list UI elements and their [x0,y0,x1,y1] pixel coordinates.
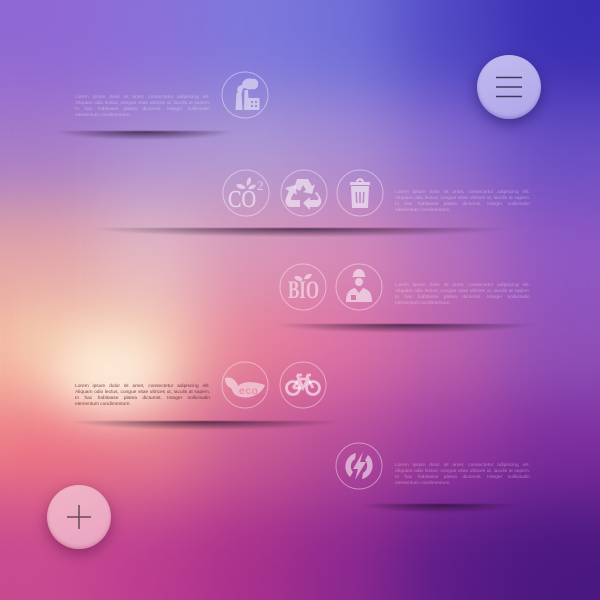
panel: row 1 factory [62,72,268,140]
icon: CO2 leaf [222,170,270,216]
text block: elementum condimentum. [395,301,451,306]
icon: recycle [280,170,328,216]
panel: row 2 CO2, recycle, bin [104,170,530,236]
text block [75,94,210,118]
icon: energy bolt [336,442,382,490]
text block: elementum condimentum. [395,208,451,213]
icon: plus [67,505,91,529]
icon: CO2 leaf: 2 [257,178,264,193]
text block: elementum condimentum. [75,113,131,118]
text block: In hac habitasse platea dictumst. Integer sollicitudin [75,107,210,112]
text block: Lorem ipsum dolor sit amet, consectetur adipiscing elit. [395,190,530,195]
icon: trash bin [336,170,384,216]
icon: eco leaf: eco [239,385,258,397]
shelf shadow [275,324,537,333]
text block [75,384,210,407]
button: add [47,485,111,549]
icon: eco leaf [222,362,268,408]
text block: Aliquam odio lectus, congue vitae ultrices ut, iaculis at sapien. [75,101,210,106]
text block: Aliquam odio lectus, congue vitae ultrices ut, iaculis at sapien. [75,390,210,395]
panel: row 3 bio, engineer [280,264,530,332]
text block [395,282,530,306]
text block: Lorem ipsum dolor sit amet, consectetur adipiscing elit. [75,95,210,100]
text block: elementum condimentum. [75,402,131,407]
text block: Aliquam odio lectus, congue vitae ultrices ut, iaculis at sapien. [395,196,530,201]
button: menu [477,55,541,119]
text block: Aliquam odio lectus, congue vitae ultrices ut, iaculis at sapien. [395,289,530,294]
text block: In hac habitasse platea dictumst. Integer sollicitudin [395,475,530,480]
icon: CO2 leaf: CO [228,187,256,213]
text block [395,190,530,213]
text block: In hac habitasse platea dictumst. Integer sollicitudin [395,202,530,207]
icon: hamburger [496,76,522,98]
text block: In hac habitasse platea dictumst. Integer sollicitudin [75,396,210,401]
text block: elementum condimentum. [395,481,451,486]
text block [395,462,530,486]
text block: Lorem ipsum dolor sit amet, consectetur adipiscing elit. [395,463,530,468]
panel: row 5 energy [336,442,530,512]
shelf shadow [360,504,520,513]
icon: bicycle [280,362,326,408]
icon: engineer [336,264,382,310]
shelf shadow [55,131,235,140]
text block: Aliquam odio lectus, congue vitae ultrices ut, iaculis at sapien. [395,469,530,474]
shelf shadow [90,228,510,237]
text block: Lorem ipsum dolor sit amet, consectetur adipiscing elit. [75,384,210,389]
panel: row 4 eco, bicycle [75,362,329,430]
shelf shadow [70,421,340,430]
icon: factory [222,72,268,118]
icon: BIO [280,264,326,310]
text block: In hac habitasse platea dictumst. Integer sollicitudin [395,295,530,300]
text block: Lorem ipsum dolor sit amet, consectetur adipiscing elit. [395,283,530,288]
